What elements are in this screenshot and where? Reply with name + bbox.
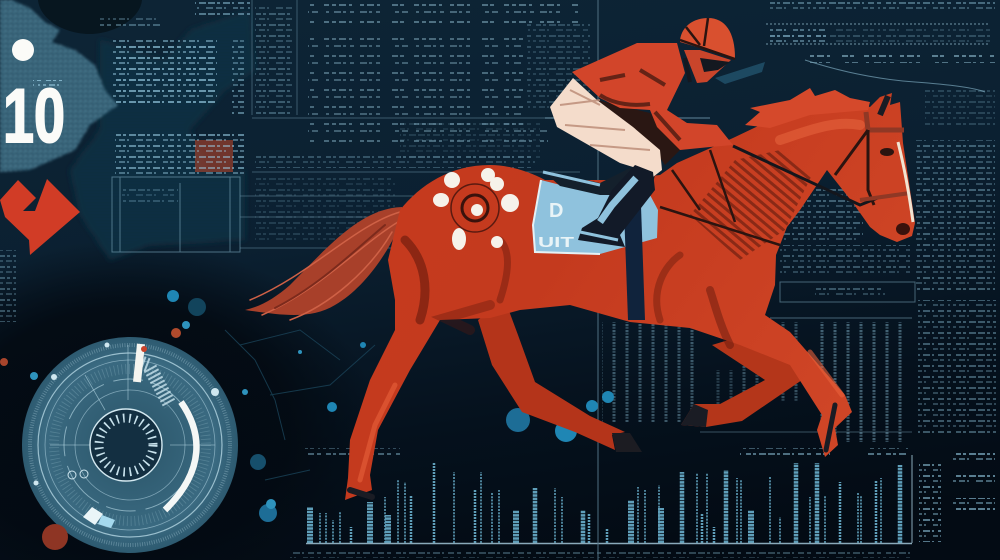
saddle <box>542 168 655 195</box>
white arc <box>165 402 196 510</box>
icon: white dot <box>12 39 34 61</box>
radar dial <box>22 337 238 553</box>
white marker nodes <box>34 342 219 486</box>
white breeches <box>550 78 662 177</box>
small red marker <box>141 346 147 352</box>
grid data tables, top right <box>715 2 995 318</box>
dark underside <box>597 100 680 165</box>
horse tail <box>245 207 402 320</box>
icon: red arrow badge <box>0 179 80 255</box>
horse body <box>345 93 915 500</box>
white bar <box>137 344 141 382</box>
boot highlight <box>580 178 636 222</box>
breeches folds <box>560 90 650 150</box>
horse mane <box>745 88 870 128</box>
helmet stripes <box>680 18 735 59</box>
horse shading <box>350 124 860 497</box>
data table, upper left <box>0 2 250 322</box>
saddle rim <box>543 172 600 185</box>
vertical divider <box>597 0 599 560</box>
blue data dots <box>0 290 614 522</box>
centre ticks <box>99 418 153 472</box>
dark vignette lower left <box>0 240 420 560</box>
bottom white blocks <box>83 507 103 525</box>
red jacket <box>572 43 733 150</box>
horizontal chart rule <box>545 117 710 119</box>
bar chart <box>306 455 912 544</box>
girth strap <box>624 206 645 320</box>
cloth mark: D <box>549 200 563 222</box>
vertical data columns, lower right <box>602 300 996 442</box>
dial centre <box>90 409 162 481</box>
textured map region, upper left <box>0 0 255 260</box>
cloth letters: UIT <box>538 234 574 251</box>
neck strap <box>685 58 690 82</box>
grid data tables, top centre <box>240 0 590 248</box>
rump marker circles <box>433 168 519 250</box>
jockey <box>550 18 735 247</box>
label above number <box>33 80 62 87</box>
big number 10: 10 <box>3 74 65 159</box>
tick block <box>140 362 170 405</box>
side notes, lower right <box>290 448 995 558</box>
riding boot <box>578 165 655 247</box>
dial rings <box>30 345 230 545</box>
face <box>684 50 731 83</box>
goggles <box>700 58 730 72</box>
saddle cloth <box>533 180 658 254</box>
helmet <box>680 18 735 58</box>
horse far legs <box>478 300 802 452</box>
jacket shadows <box>600 70 680 140</box>
boot sole <box>580 232 618 240</box>
red ball <box>42 524 68 550</box>
map traces, lower centre <box>225 330 375 480</box>
bridle and reins <box>660 96 913 245</box>
